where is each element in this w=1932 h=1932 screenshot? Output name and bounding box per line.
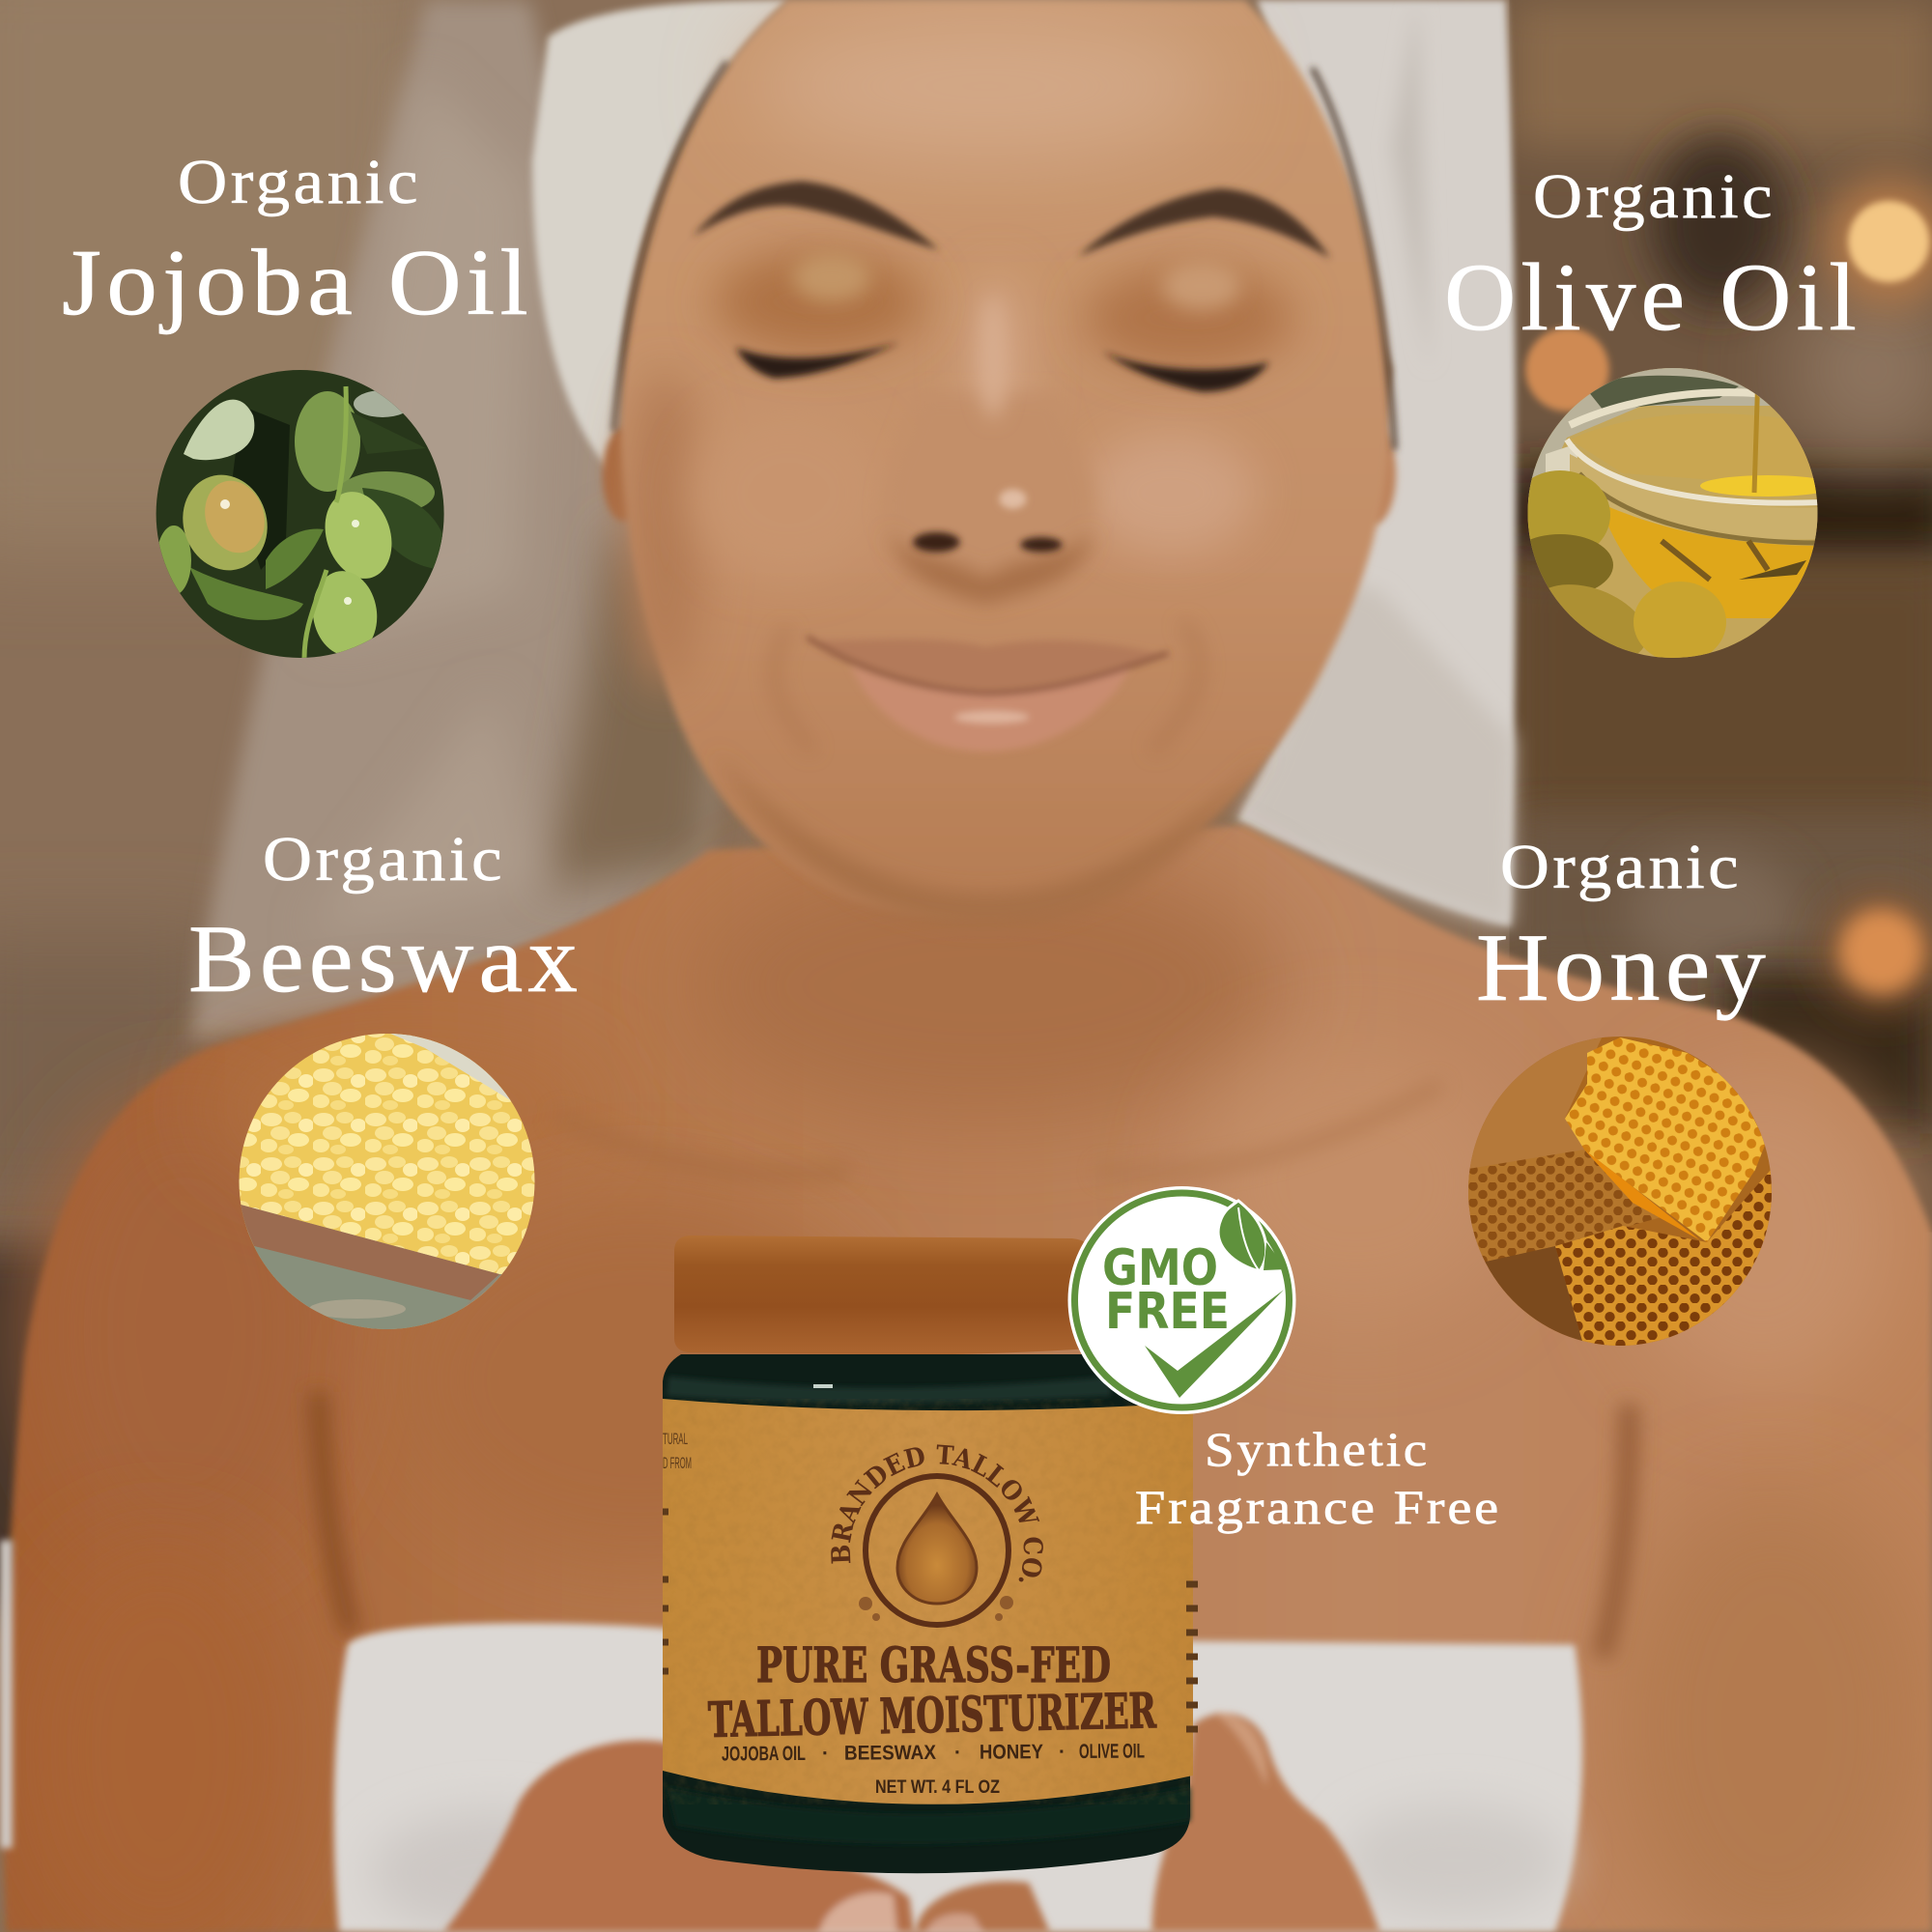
ingredient line: OLIVE OIL [1079, 1740, 1145, 1763]
ears [603, 425, 1396, 524]
towel: back drape [191, 0, 739, 1041]
heading: jojoba oil: Jojoba Oil [62, 231, 533, 335]
jar lid [674, 1236, 1092, 1354]
ingredient: jojoba oil [62, 147, 533, 661]
ingredient line: · [822, 1743, 829, 1765]
badge leaf [1218, 1201, 1266, 1271]
product name [707, 1636, 1157, 1748]
eyelashes: left [735, 343, 899, 379]
jar label: D FROM [663, 1454, 692, 1472]
hand: left, under the jar [443, 1741, 914, 1932]
ingredient line: HONEY [980, 1741, 1043, 1764]
ingredient: beeswax [188, 824, 582, 1333]
jar label: TURAL [663, 1430, 688, 1448]
badge: GMO free: GMO [1102, 1239, 1218, 1297]
heading: honey: Honey [1476, 914, 1771, 1021]
eyelashes: right [1103, 352, 1269, 392]
eyebrow: right [1078, 188, 1331, 259]
logo wordmark: BRANDED TALLOW CO. [831, 1444, 1043, 1582]
heading: olive oil: Olive Oil [1444, 243, 1861, 351]
ingredient line: BEESWAX [844, 1742, 936, 1765]
photo circle: jojoba fruits [155, 367, 449, 661]
heading: organic: Organic [1500, 832, 1742, 902]
bokeh lights [1525, 178, 1932, 1008]
nose [884, 296, 1094, 604]
product name: PURE GRASS-FED [756, 1636, 1111, 1693]
photo circle: beeswax pellets [237, 1024, 541, 1333]
claim: synthetic fragrance free: Fragrance Free [1135, 1480, 1501, 1534]
towel: head wrap [532, 0, 1516, 926]
body: shoulders, chest and arms [4, 826, 1932, 1932]
logo drop [897, 1494, 977, 1604]
jar glass [663, 1354, 1190, 1873]
side marks [663, 1512, 1198, 1729]
badge check mark [1145, 1290, 1284, 1398]
heading: beeswax: Beeswax [188, 905, 582, 1012]
hand: right, under the jar [916, 1713, 1380, 1932]
heading: organic: Organic [178, 147, 421, 217]
smile creases [774, 622, 1200, 752]
lips [807, 637, 1168, 752]
claim: synthetic fragrance free [1135, 1422, 1501, 1534]
claim: synthetic fragrance free: Synthetic [1205, 1422, 1430, 1476]
face [613, 0, 1395, 926]
fruit [183, 475, 268, 570]
towel: wrapped around chest [0, 1540, 1582, 1932]
logo [831, 1444, 1043, 1628]
photo circle: honeycomb [1466, 1034, 1777, 1348]
jar label [663, 1399, 1198, 1804]
ingredient line: JOJOBA OIL [722, 1743, 806, 1766]
ingredient line: · [954, 1742, 961, 1764]
photo circle: oil bowl and olives [1528, 368, 1818, 658]
heading: organic: Organic [263, 824, 505, 895]
net weight: NET WT. 4 FL OZ [875, 1777, 1000, 1798]
product: tallow jar [663, 1236, 1198, 1874]
ingredient: honey [1466, 832, 1777, 1348]
badge: GMO free: FREE [1105, 1283, 1230, 1341]
eyebrow: left [693, 181, 939, 250]
ingredient: olive oil [1444, 161, 1861, 676]
product name: TALLOW MOISTURIZER [707, 1682, 1157, 1748]
ingredient line [722, 1740, 1145, 1766]
ingredient line: · [1059, 1741, 1065, 1763]
badge: GMO free [1068, 1186, 1296, 1414]
eyelid shadows [715, 250, 1293, 370]
heading: organic: Organic [1533, 161, 1776, 232]
